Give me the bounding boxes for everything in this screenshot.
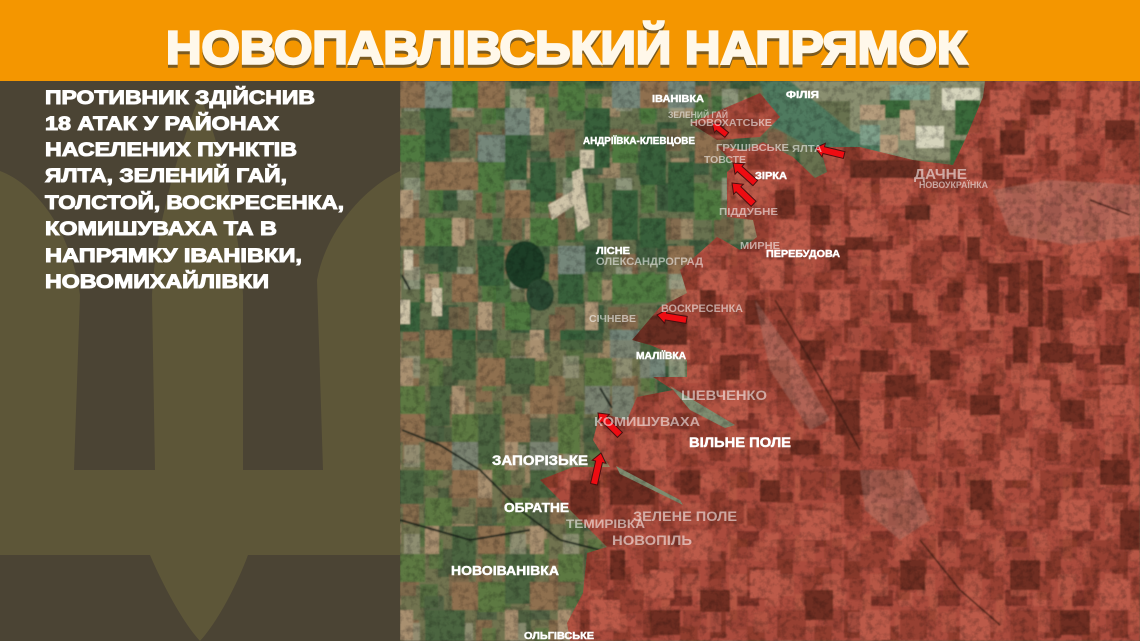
arrow: Комишуваха <box>593 408 625 440</box>
satellite texture <box>400 81 1140 641</box>
map labels: ПІДДУБНЕ <box>719 206 778 218</box>
left panel background <box>0 81 400 641</box>
map labels: ВОСКРЕСЕНКА <box>661 303 743 315</box>
summary text block: КОМИШУВАХА ТА В <box>45 218 277 240</box>
natural terrain fields <box>400 81 1140 641</box>
summary text block <box>45 85 344 293</box>
map labels: ЯЛТА <box>792 143 822 155</box>
arrow: Зелений Гай <box>708 118 731 140</box>
map labels: ШЕВЧЕНКО <box>681 387 767 403</box>
map labels: ФІЛІЯ <box>786 90 819 101</box>
map labels <box>451 90 988 641</box>
summary text block: ТОЛСТОЙ, ВОСКРЕСЕНКА, <box>45 190 344 214</box>
map labels: ЗЕЛЕНИЙ ГАЙ <box>668 109 728 120</box>
summary text block: 18 АТАК У РАЙОНАХ <box>45 111 279 135</box>
arrow: Товсте <box>728 158 760 188</box>
map labels: ЗЕЛЕНЕ ПОЛЕ <box>633 508 737 524</box>
map labels: ЛІСНЕ <box>596 245 630 257</box>
map labels: ВІЛЬНЕ ПОЛЕ <box>689 434 791 450</box>
occupied territory overlay <box>540 81 1140 641</box>
map labels: МАЛІЇВКА <box>636 349 686 362</box>
map labels: СІЧНЕВЕ <box>589 313 636 325</box>
map labels: НОВОХАТСЬКЕ <box>690 118 772 129</box>
arrow: Воскресенка <box>656 308 688 327</box>
title: НОВОПАВЛІВСЬКИЙ НАПРЯМОК <box>166 22 968 74</box>
map labels: ІВАНІВКА <box>652 94 704 105</box>
summary text block: НАПРЯМКУ ІВАНІВКИ, <box>45 245 302 267</box>
arrow: Піддубне <box>727 178 758 209</box>
arrow: Запорізьке <box>587 451 608 486</box>
map labels: МИРНЕ <box>740 240 780 252</box>
summary text block: НАСЕЛЕНИХ ПУНКТІВ <box>45 139 297 161</box>
map labels: ОЛЕКСАНДРОГРАД <box>596 256 703 268</box>
summary text block: ЯЛТА, ЗЕЛЕНИЙ ГАЙ, <box>45 163 287 187</box>
map labels: АНДРІЇВКА-КЛЕВЦОВЕ <box>583 134 695 147</box>
satellite map <box>400 81 1140 641</box>
map labels: НОВОУКРАЇНКА <box>919 180 988 190</box>
map labels: НОВОІВАНІВКА <box>451 563 560 578</box>
summary text block: ПРОТИВНИК ЗДІЙСНИВ <box>45 85 315 109</box>
map labels: ДАЧНЕ <box>914 166 967 183</box>
map labels: ГРУШІВСЬКЕ <box>716 142 789 154</box>
arrow: Ялта <box>813 141 846 162</box>
title: НОВОПАВЛІВСЬКИЙ НАПРЯМОК <box>166 24 968 76</box>
map labels: ОБРАТНЕ <box>504 500 569 515</box>
map labels: ПЕРЕБУДОВА <box>766 248 840 260</box>
map labels: НОВОПІЛЬ <box>612 532 692 548</box>
summary text block: НОВОМИХАЙЛІВКИ <box>45 269 269 293</box>
map arrows <box>587 118 846 486</box>
map labels: ТОВСТЕ <box>704 154 746 166</box>
map labels: КОМИШУВАХА <box>594 414 701 429</box>
header band <box>0 0 1140 81</box>
trident emblem watermark <box>0 95 400 641</box>
map labels: ТЕМИРІВКА <box>566 517 645 531</box>
map labels: ЗІРКА <box>755 170 787 182</box>
valley strips <box>616 386 735 505</box>
map labels: ЗАПОРІЗЬКЕ <box>492 452 588 468</box>
